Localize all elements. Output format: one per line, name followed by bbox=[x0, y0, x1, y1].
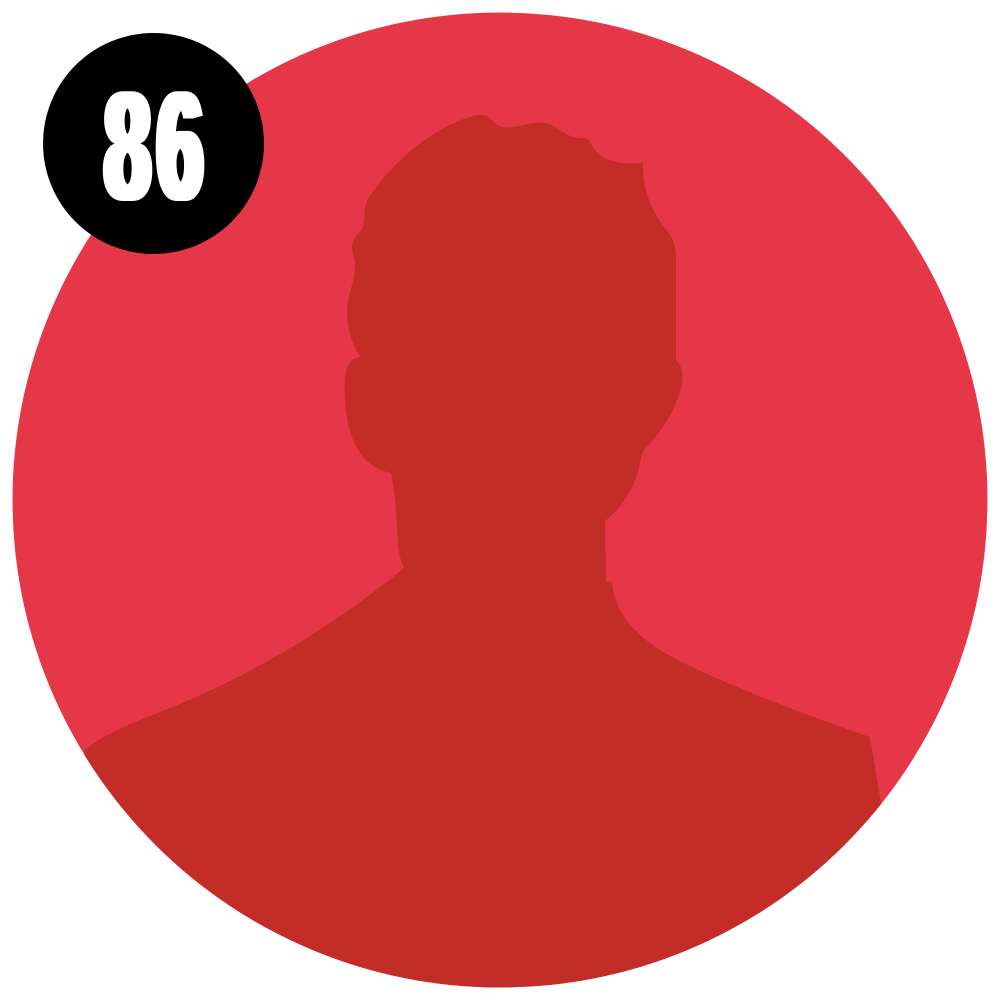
rank badge bbox=[43, 33, 264, 254]
rank number: 8 bbox=[105, 61, 150, 233]
badge circle bbox=[43, 33, 264, 254]
silhouette of person bbox=[84, 115, 881, 1000]
rank number bbox=[105, 61, 203, 233]
rank number: 6 bbox=[157, 61, 203, 233]
